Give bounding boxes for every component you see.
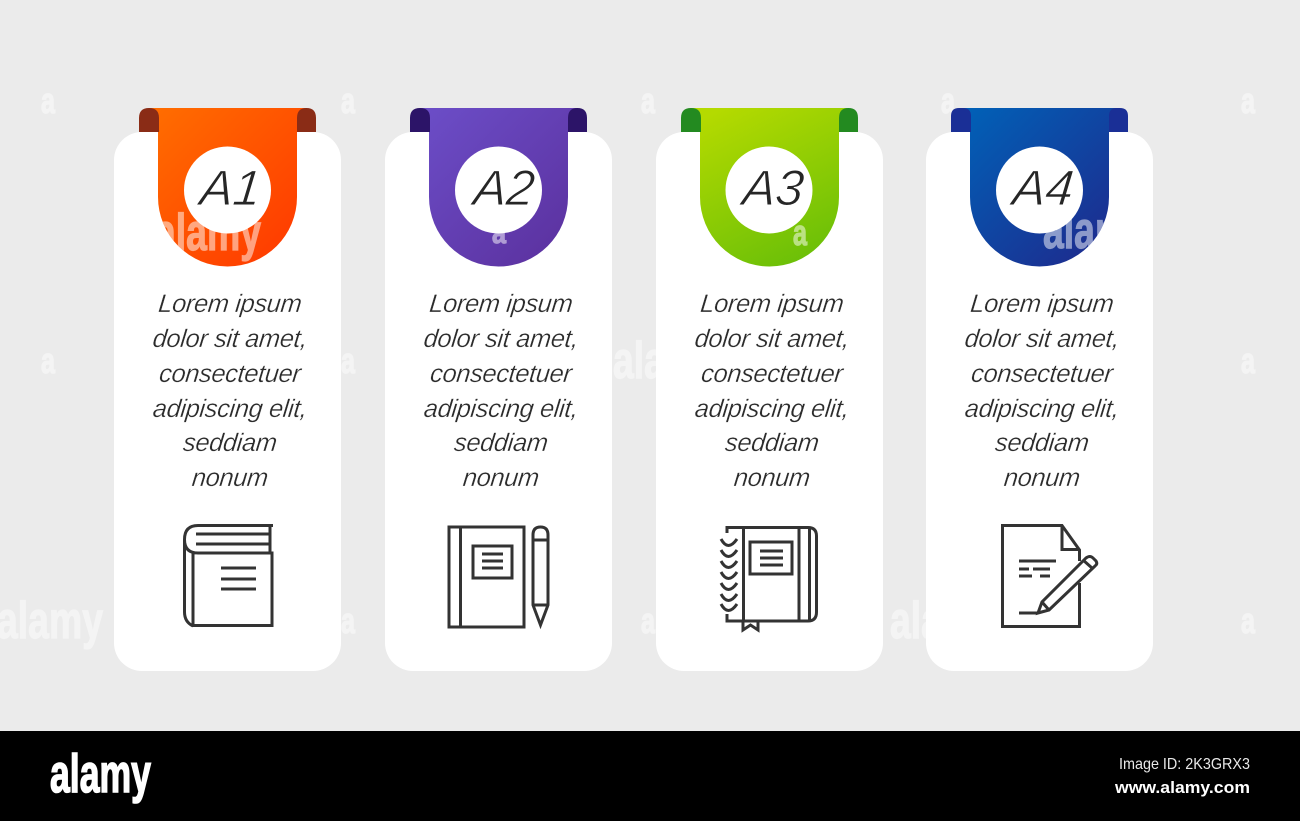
text A2: consectetuer	[429, 360, 575, 388]
footer logo: alamy	[50, 744, 151, 804]
text A1: seddiam	[182, 429, 278, 457]
text A2: dolor sit amet,	[422, 325, 580, 353]
watermarks on background: a	[341, 80, 356, 121]
text A4: adipiscing elit,	[964, 395, 1120, 423]
text A3: dolor sit amet,	[693, 325, 851, 353]
watermarks on background: a	[341, 340, 356, 381]
text A2: Lorem ipsum	[428, 290, 574, 318]
text A4: Lorem ipsum	[969, 290, 1115, 318]
text A3: Lorem ipsum	[699, 290, 845, 318]
icon: document and pen	[1002, 526, 1097, 626]
watermarks on background: a	[1241, 80, 1256, 121]
text A2: adipiscing elit,	[423, 395, 579, 423]
badge A4: A4	[1007, 160, 1076, 216]
text A4: dolor sit amet,	[963, 325, 1121, 353]
watermarks on background: a	[941, 80, 956, 121]
card A1	[114, 132, 341, 671]
card A4	[926, 132, 1153, 671]
text A1: dolor sit amet,	[151, 325, 309, 353]
text A3: adipiscing elit,	[694, 395, 850, 423]
ribbon A2: a	[492, 217, 506, 250]
watermarks on background: a	[1241, 340, 1256, 381]
ribbon A1: alamy	[155, 204, 261, 262]
badge A4	[996, 146, 1083, 234]
panel: A3	[656, 108, 883, 671]
badge A2: A2	[468, 160, 538, 216]
icon: book	[184, 526, 273, 626]
text A2: seddiam	[453, 429, 549, 457]
watermarks on background: a	[341, 600, 356, 641]
ribbon A2	[410, 108, 587, 266]
ribbon A4: alamy	[1043, 202, 1149, 260]
card A2	[385, 132, 612, 671]
watermarks on background: alamy	[0, 592, 103, 650]
watermarks on background: alamy	[890, 592, 996, 650]
text A1: Lorem ipsum	[157, 290, 303, 318]
image id: Image ID: 2K3GRX3	[1119, 756, 1250, 773]
icon: notebook and pencil	[449, 527, 548, 627]
text A1	[151, 290, 309, 492]
watermarks on background: a	[41, 340, 56, 381]
text A4: consectetuer	[970, 360, 1116, 388]
text A3: consectetuer	[700, 360, 846, 388]
badge A3: A3	[737, 160, 807, 216]
badge A2	[455, 146, 542, 234]
watermarks on background: a	[641, 600, 656, 641]
panel: A2	[385, 108, 612, 671]
text A2	[422, 290, 580, 492]
text A3: seddiam	[724, 429, 820, 457]
badge A1: A1	[195, 160, 264, 216]
icon: spiral notebook	[721, 528, 816, 630]
text A2: nonum	[462, 464, 541, 492]
text A4	[963, 290, 1121, 492]
watermarks on background: alamy	[613, 332, 719, 390]
ribbon A3: a	[793, 212, 808, 253]
panel: A1	[114, 108, 341, 671]
text A3	[693, 290, 851, 492]
badge A1	[184, 146, 271, 234]
watermarks on background: a	[641, 80, 656, 121]
footer bar	[0, 731, 1300, 821]
panel: A4	[926, 108, 1153, 671]
text A1: adipiscing elit,	[152, 395, 308, 423]
ribbon A1	[139, 108, 316, 266]
watermarks on background	[0, 80, 1256, 650]
badge A3	[726, 146, 812, 234]
website: www.alamy.com	[1114, 778, 1250, 797]
ribbon A4	[951, 108, 1128, 266]
watermarks on background: a	[41, 80, 56, 121]
ribbon A3	[681, 108, 858, 266]
text A4: seddiam	[994, 429, 1090, 457]
text A3: nonum	[733, 464, 812, 492]
text A1: nonum	[191, 464, 270, 492]
watermarks on background: a	[1241, 600, 1256, 641]
text A1: consectetuer	[158, 360, 304, 388]
card A3	[656, 132, 883, 671]
text A4: nonum	[1003, 464, 1082, 492]
